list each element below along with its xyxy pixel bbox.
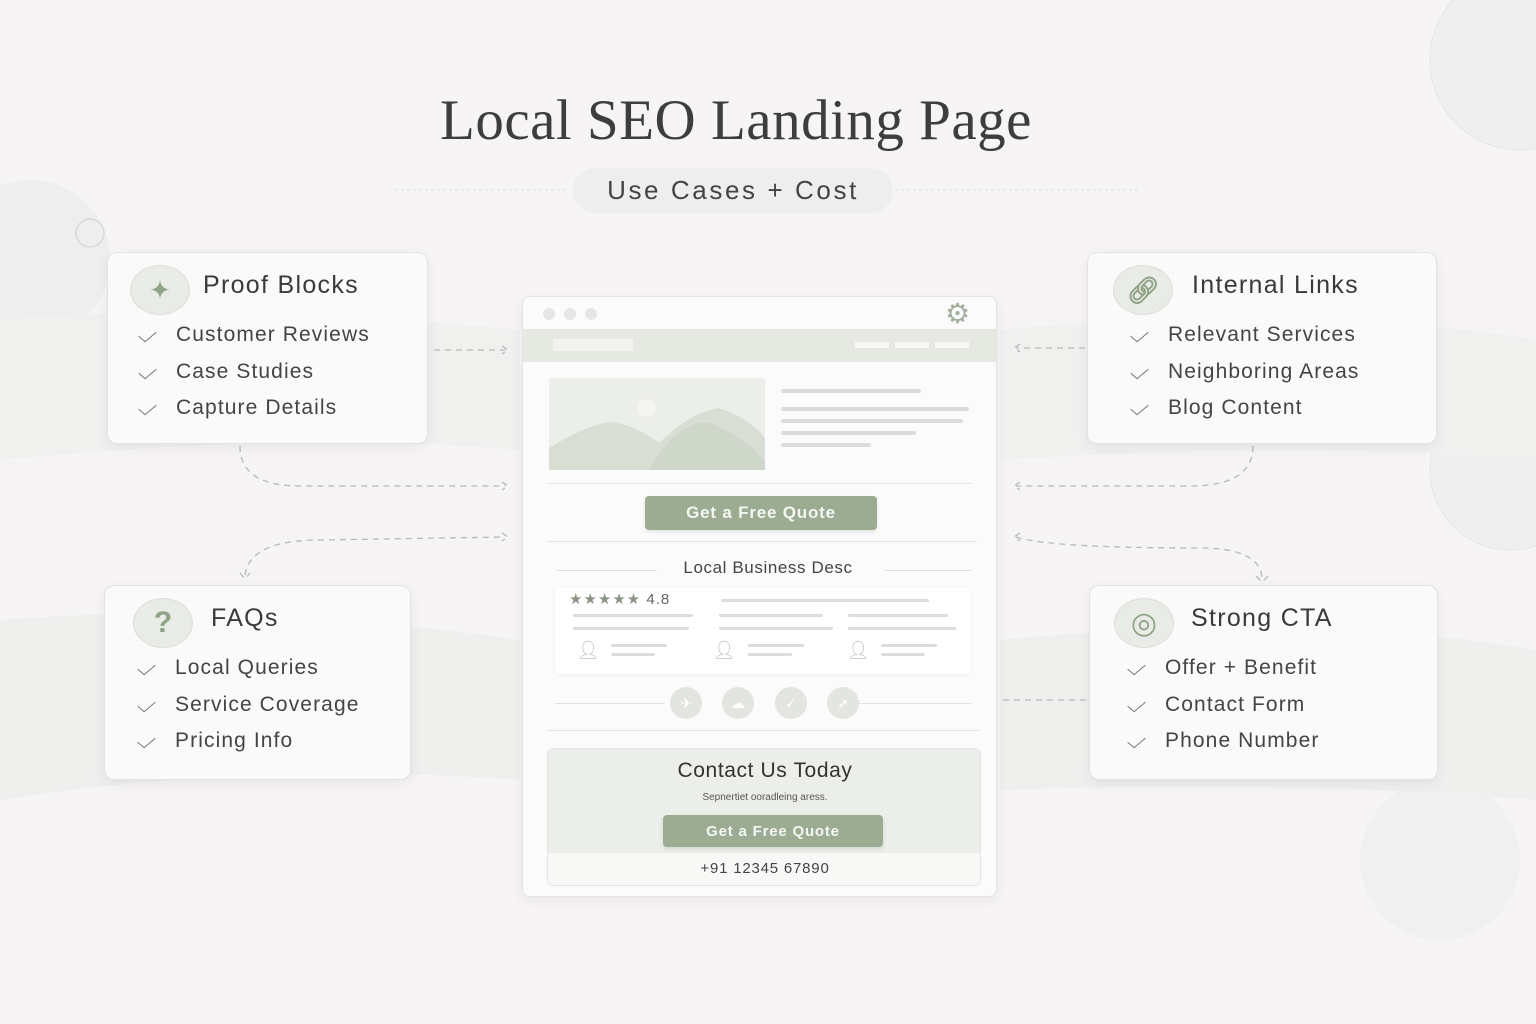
panel: strong cta: Contact Form [1165, 692, 1305, 716]
panel: strong cta: Strong CTA [1191, 604, 1333, 632]
panel: faqs [104, 585, 411, 780]
panel: internal links: Internal Links [1192, 271, 1359, 299]
icon: target [1114, 598, 1174, 648]
panel: strong cta [1089, 585, 1438, 780]
contact section [547, 748, 981, 886]
panel: faqs: Pricing Info [175, 729, 293, 752]
panel: faqs: Local Queries [175, 656, 319, 679]
icon: question: ? [154, 606, 172, 639]
icon: question [133, 598, 193, 648]
reviews box: 👤︎ [713, 640, 736, 660]
panel: faqs: Service Coverage [175, 692, 360, 716]
button: get a free quote [645, 496, 877, 530]
service icons: ✓ [785, 694, 797, 710]
icon: link: 🔗︎ [1126, 274, 1160, 304]
panel: internal links: Neighboring Areas [1168, 360, 1359, 382]
panel: proof blocks: Proof Blocks [203, 271, 359, 299]
button: contact quote [663, 815, 883, 847]
reviews box [555, 588, 971, 674]
button: contact quote: Get a Free Quote [706, 822, 840, 840]
panel: faqs: FAQs [211, 604, 279, 632]
panel: proof blocks: Case Studies [176, 360, 314, 382]
icon: target: ◎ [1131, 606, 1157, 640]
nav bar [523, 329, 996, 362]
panel: strong cta: Offer + Benefit [1165, 656, 1317, 679]
contact section: Contact Us Today [678, 759, 852, 782]
service icons [555, 687, 971, 719]
reviews box: 👤︎ [577, 640, 600, 660]
panel: internal links: Blog Content [1168, 396, 1303, 419]
icon: link [1113, 265, 1173, 315]
reviews box: ★★★★★ 4.8 [569, 591, 670, 608]
title: Local SEO Landing Page [440, 89, 1032, 152]
panel: proof blocks: Capture Details [176, 396, 337, 419]
service icons: ➚ [837, 694, 849, 710]
local business desc: Local Business Desc [683, 558, 853, 577]
contact section: +91 12345 67890 [700, 860, 830, 877]
landing page mockup [522, 296, 997, 897]
service icons: ☁ [731, 694, 745, 710]
reviews box: 👤︎ [847, 640, 870, 660]
panel: proof blocks: Customer Reviews [176, 323, 370, 346]
subtitle pill [573, 168, 893, 213]
icon: proof: ✦ [149, 274, 171, 304]
contact section: Sepnertiet ooradleing aress. [702, 792, 828, 803]
hero image [549, 378, 765, 470]
service icons: ✈ [680, 694, 692, 710]
button: get a free quote: Get a Free Quote [686, 503, 836, 522]
icon: gear: ⚙ [945, 298, 970, 329]
panel: strong cta: Phone Number [1165, 729, 1319, 752]
browser dots [543, 308, 597, 320]
panel: proof blocks [107, 252, 428, 444]
panel: internal links: Relevant Services [1168, 323, 1356, 346]
icon: proof [130, 265, 190, 315]
subtitle pill: Use Cases + Cost [607, 175, 859, 205]
panel: internal links [1087, 252, 1437, 444]
